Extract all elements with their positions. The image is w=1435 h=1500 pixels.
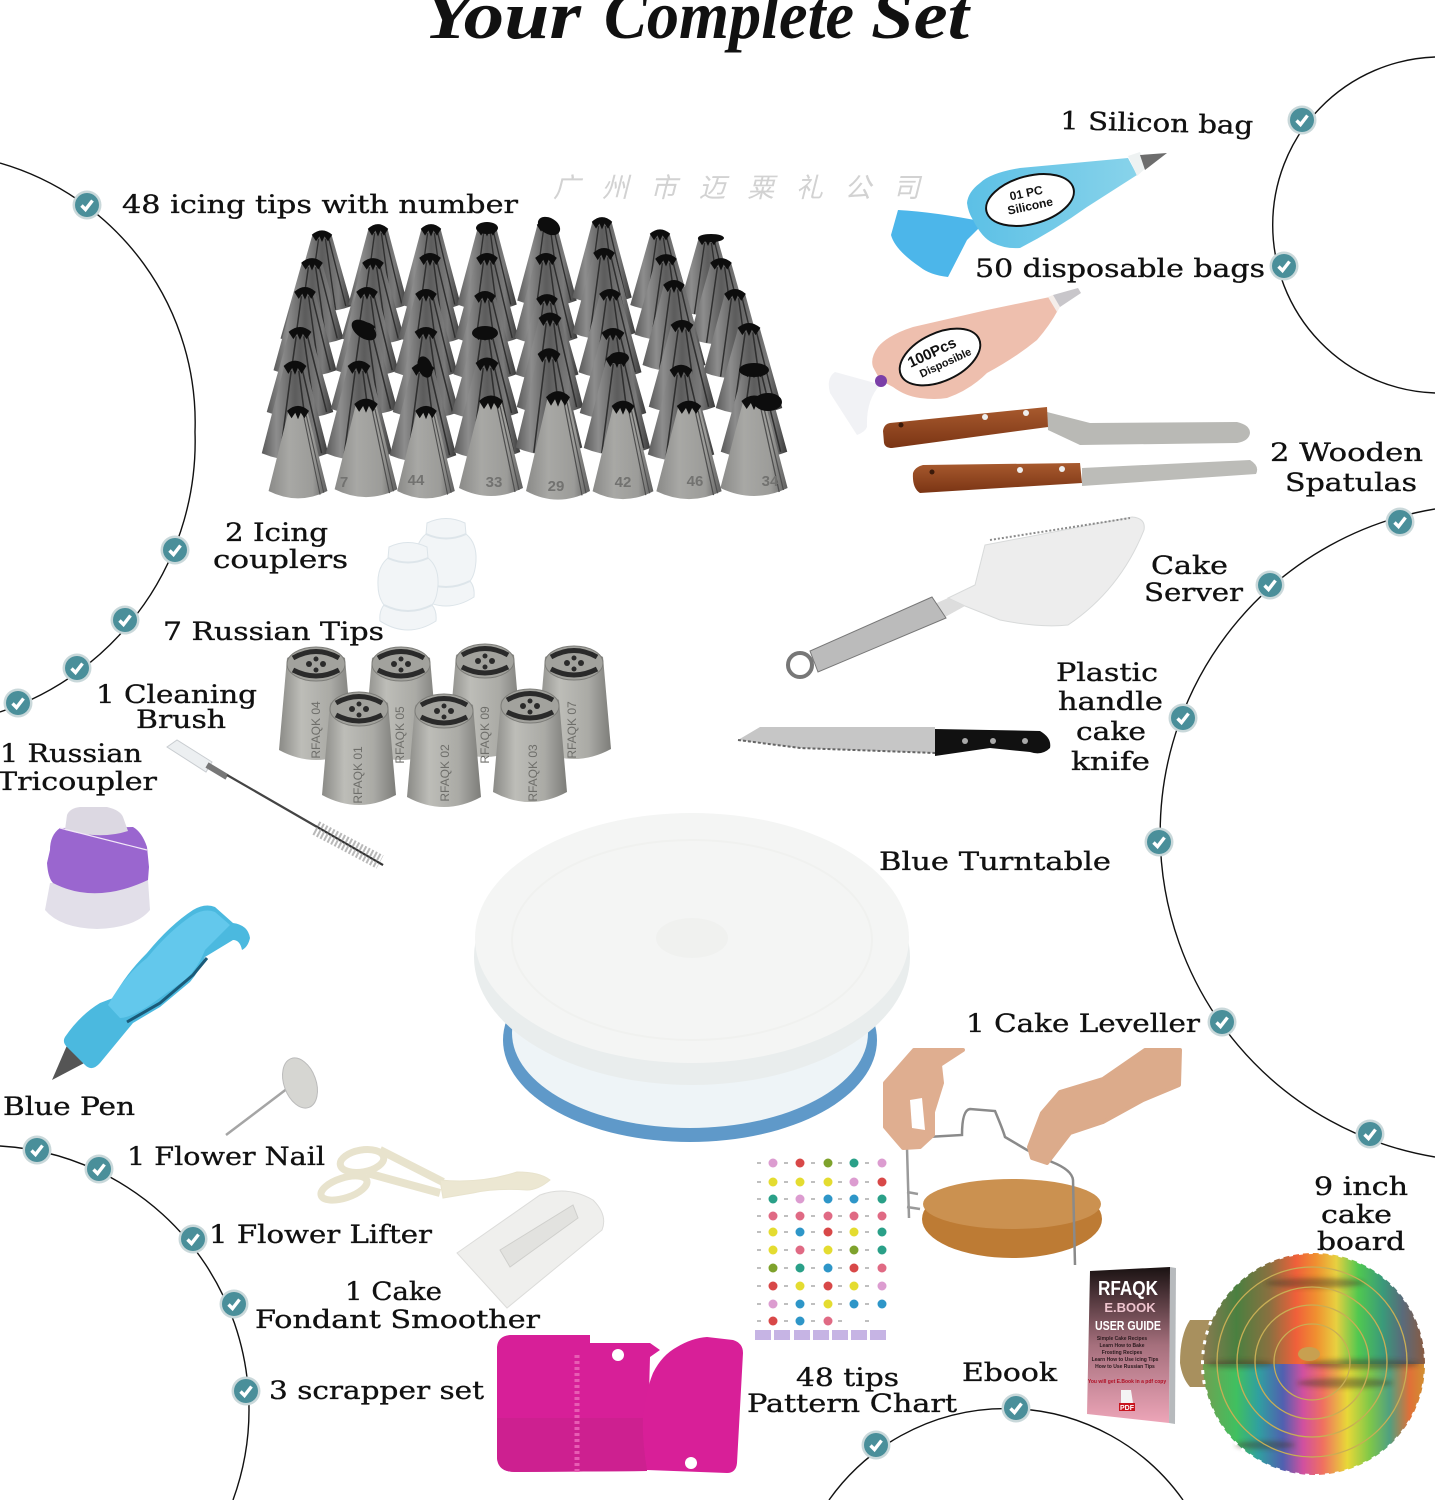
label: plastic handle cake knife: Plastic	[1056, 658, 1158, 687]
icon: 48 tips pattern chart	[755, 1158, 886, 1340]
label: blue pen: Blue Pen	[3, 1092, 135, 1121]
icon: russian tips: RFAQK 04	[309, 701, 323, 759]
label: 2 wooden spatulas	[1270, 438, 1423, 497]
icon: cake turntable	[474, 813, 910, 1142]
label: 3 scrapper set: 3 scrapper set	[269, 1376, 484, 1405]
tip numbers: 46	[687, 473, 703, 490]
label: 48 tips pattern chart: Pattern Chart	[747, 1389, 957, 1418]
icon: silicone piping bag	[891, 152, 1167, 277]
label: 1 flower nail: 1 Flower Nail	[127, 1142, 325, 1171]
label: plastic handle cake knife	[1056, 658, 1163, 776]
icon: russian tips	[279, 644, 611, 807]
tip numbers: 33	[486, 474, 502, 491]
icon: ebook cover: Frosting Recipes	[1102, 1350, 1142, 1356]
icon: russian tips: RFAQK 03	[526, 744, 540, 802]
label: blue turntable: Blue Turntable	[879, 847, 1111, 876]
icon: ebook cover: RFAQK	[1098, 1278, 1158, 1300]
label: cake server: Cake	[1151, 551, 1228, 580]
tip numbers: 42	[615, 474, 631, 491]
label: plastic handle cake knife: cake	[1076, 717, 1146, 746]
label: 1 cleaning brush: 1 Cleaning	[96, 680, 257, 709]
icon: flower lifter	[318, 1146, 550, 1205]
watermark: 广州市迈粟礼公司	[553, 173, 923, 203]
icon: russian tips: RFAQK 09	[478, 706, 492, 764]
tip numbers: 29	[548, 478, 564, 495]
icon: ebook cover: How to Use Russian Tips	[1095, 1364, 1155, 1370]
icon: fondant smoother	[457, 1191, 604, 1308]
icon: straight spatula	[913, 460, 1257, 493]
icon: 48 icing tips	[262, 213, 788, 500]
label: 2 wooden spatulas: Spatulas	[1285, 468, 1417, 497]
icon: ebook cover: Simple Cake Recipes	[1097, 1336, 1147, 1342]
tip numbers: 44	[408, 472, 425, 489]
icon: ebook cover: PDF	[1120, 1405, 1135, 1412]
icon: ebook cover	[1087, 1267, 1176, 1424]
icon: bread knife	[738, 727, 1050, 756]
icon: cleaning brush	[167, 740, 383, 865]
icon: disposable piping bag	[829, 288, 1081, 435]
label: 2 wooden spatulas: 2 Wooden	[1270, 438, 1423, 467]
label: plastic handle cake knife: handle	[1058, 687, 1163, 716]
large tip openings	[348, 213, 769, 380]
label: 1 flower lifter: 1 Flower Lifter	[209, 1220, 432, 1249]
icon: russian tips: RFAQK 01	[351, 746, 365, 804]
icon: russian tips: RFAQK 02	[438, 744, 452, 802]
label: 9 inch cake board: board	[1317, 1227, 1405, 1256]
label: 48 tips pattern chart	[747, 1363, 957, 1418]
icon: cake server	[788, 517, 1144, 677]
icon: flower nail	[226, 1053, 324, 1135]
label: 2 icing couplers: couplers	[213, 545, 348, 574]
icon: russian tips: RFAQK 05	[393, 706, 407, 764]
icon: cake leveller with hands	[885, 1050, 1180, 1265]
label: 7 russian tips: 7 Russian Tips	[163, 617, 384, 646]
label: 1 russian tricoupler: 1 Russian	[0, 739, 142, 768]
icon: holographic cake board	[1180, 1252, 1426, 1476]
label: 2 icing couplers	[213, 518, 348, 574]
label: 1 cleaning brush	[96, 680, 257, 734]
icon: ebook cover: E.BOOK	[1104, 1300, 1156, 1315]
label: plastic handle cake knife: knife	[1071, 747, 1150, 776]
label: 1 russian tricoupler	[0, 739, 157, 796]
icon: disposable piping bag: Disposible	[918, 346, 973, 380]
label: cake server	[1144, 551, 1243, 607]
icon: ebook cover: Learn How to Bake	[1099, 1343, 1145, 1349]
label: 1 cake fondant smoother: 1 Cake	[345, 1277, 442, 1306]
label: 1 silicon bag: 1 Silicon bag	[1060, 106, 1254, 140]
label: 48 icing tips: 48 icing tips with number	[122, 190, 518, 219]
tip numbers	[340, 472, 779, 495]
label: ebook: Ebook	[962, 1358, 1058, 1387]
label: 1 russian tricoupler: Tricoupler	[0, 767, 157, 796]
label: 50 disposable bags: 50 disposable bags	[975, 254, 1265, 283]
label: 48 tips pattern chart: 48 tips	[796, 1363, 899, 1392]
label: 1 cake leveller: 1 Cake Leveller	[966, 1009, 1200, 1038]
label: 1 cake fondant smoother: Fondant Smoother	[255, 1305, 540, 1334]
label: 9 inch cake board: cake	[1321, 1200, 1392, 1229]
icon: russian tips: RFAQK 07	[565, 701, 579, 759]
title	[423, 0, 971, 53]
icon: ebook cover: Learn How to Use icing Tips	[1092, 1357, 1159, 1363]
label: 2 icing couplers: 2 Icing	[225, 518, 328, 547]
icon: offset spatula	[883, 407, 1250, 448]
label: 9 inch cake board	[1314, 1172, 1408, 1256]
icon: silicone piping bag: Silicone	[1006, 194, 1054, 218]
icon: silicone piping bag: 01 PC	[1008, 183, 1044, 203]
label: 9 inch cake board: 9 inch	[1314, 1172, 1408, 1201]
label: cake server: Server	[1144, 578, 1243, 607]
label: 1 cake fondant smoother	[255, 1277, 540, 1334]
icon: ebook cover: USER GUIDE	[1095, 1318, 1161, 1333]
icon: scraper set	[497, 1335, 743, 1473]
icon: couplers	[378, 518, 476, 630]
tip numbers: 34	[762, 473, 779, 490]
tip numbers: 7	[340, 474, 348, 491]
icon: tricoupler	[45, 807, 150, 929]
label: 1 cleaning brush: Brush	[136, 705, 226, 734]
icon: disposable piping bag: 100Pcs	[905, 334, 959, 372]
icon: blue pen	[52, 906, 250, 1080]
icon: ebook cover: You will get E.Book in a pdf copy	[1088, 1379, 1166, 1385]
large front tip opening	[754, 393, 782, 411]
